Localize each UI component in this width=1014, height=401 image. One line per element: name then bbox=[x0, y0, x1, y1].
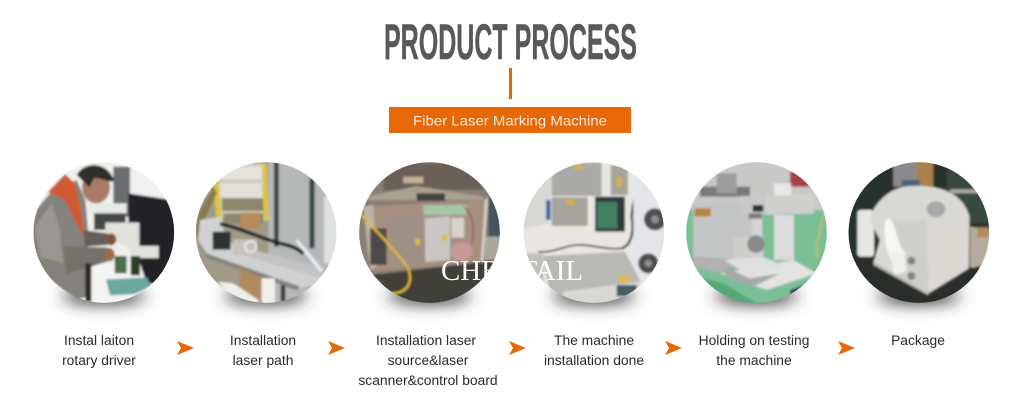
arrow 3 bbox=[509, 341, 526, 355]
caption: step 5: Holding on testing bbox=[699, 332, 809, 348]
subtitle banner: Fiber Laser Marking Machine bbox=[413, 112, 607, 128]
arrow 4 bbox=[665, 341, 682, 355]
caption: step 5: the machine bbox=[716, 352, 792, 368]
photos 3 and 4 bbox=[357, 160, 670, 307]
caption: step 3: scanner&control board bbox=[358, 372, 498, 388]
orange vertical connector bbox=[509, 68, 512, 99]
caption: step 4: installation done bbox=[544, 352, 644, 368]
photo: wrapped package bbox=[847, 160, 993, 307]
caption: step 1: Instal laiton bbox=[64, 332, 134, 348]
photo: laser source and control board bbox=[357, 160, 503, 307]
caption: step 6: Package bbox=[891, 332, 945, 348]
caption: step 3: Installation laser bbox=[376, 332, 476, 348]
arrow 5 bbox=[838, 341, 855, 355]
photos 1 and 2 bbox=[30, 160, 342, 307]
photo: testing the machine bbox=[683, 160, 830, 307]
caption: step 2: Installation bbox=[230, 332, 296, 348]
photo: installation laser path bbox=[193, 160, 342, 307]
caption: step 1: rotary driver bbox=[62, 352, 136, 368]
watermark: CHENTAIL bbox=[441, 256, 583, 287]
caption: step 2: laser path bbox=[233, 352, 293, 368]
arrow 1 bbox=[177, 341, 194, 355]
photo: machine installation done bbox=[520, 160, 670, 307]
caption: step 3: source&laser bbox=[388, 352, 469, 368]
arrow 2 bbox=[328, 341, 345, 355]
title: PRODUCT PROCESS bbox=[384, 14, 637, 70]
subtitle banner bbox=[389, 107, 631, 133]
caption: step 4: The machine bbox=[554, 332, 634, 348]
photos 5 and 6 bbox=[683, 160, 993, 307]
photo: worker installing rotary driver bbox=[30, 160, 180, 307]
